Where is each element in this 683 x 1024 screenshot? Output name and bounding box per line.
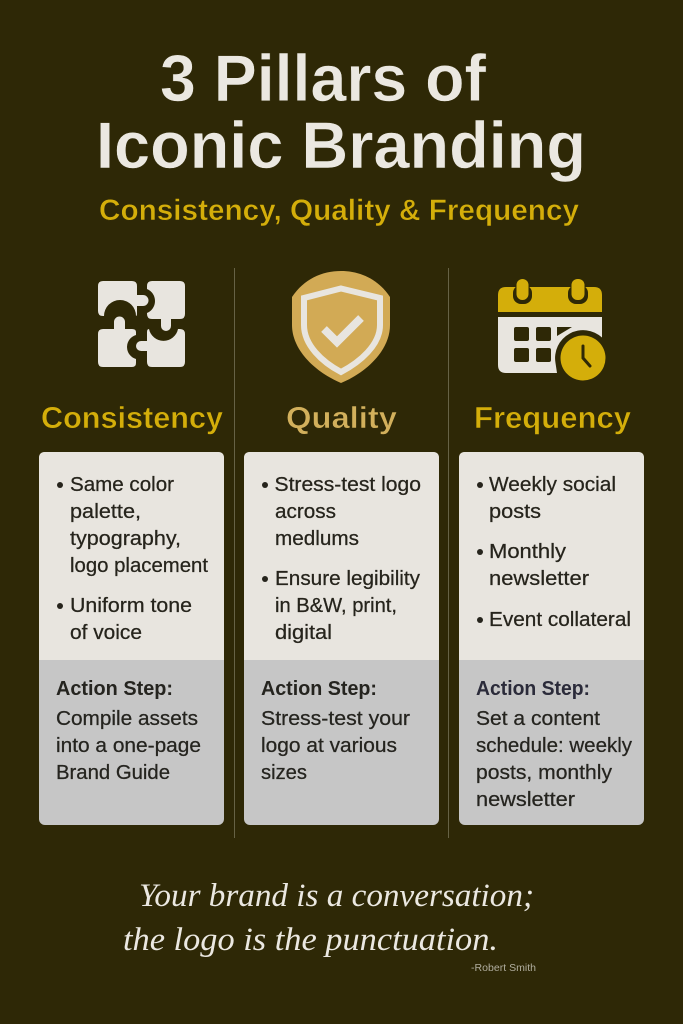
action step: frequency: schedule: weekly: [476, 735, 632, 757]
action step: frequency: Action Step:: [476, 678, 590, 700]
icon: puzzle: [98, 281, 185, 367]
action step: consistency: Compile assets: [56, 708, 198, 730]
bullet list: frequency: [477, 474, 631, 631]
bullet list: quality: across: [275, 501, 336, 523]
quote: Your brand is a conversation;: [139, 878, 534, 914]
action step: frequency: posts, monthly: [476, 762, 612, 784]
bullet list: consistency: palette,: [70, 501, 141, 523]
bullet list: quality: Ensure legibility: [275, 568, 420, 590]
panel: consistency: [39, 452, 224, 825]
action step: frequency: newsletter: [476, 789, 575, 811]
bullet list: frequency: Weekly social: [489, 474, 616, 496]
quote: the logo is the punctuation.: [123, 922, 498, 958]
action step: frequency: [476, 678, 632, 811]
bullet list: quality: digital: [275, 622, 332, 644]
quote: [123, 878, 534, 958]
panel: frequency: [459, 452, 644, 825]
bullet list: quality: [262, 474, 421, 644]
action step: consistency: [56, 678, 201, 784]
bullet list: consistency: Uniform tone: [70, 595, 192, 617]
title: 3 Pillars of: [160, 41, 487, 115]
bullet list: frequency: posts: [489, 501, 541, 523]
bullet list: consistency: of voice: [70, 622, 142, 644]
panel: quality: [244, 452, 439, 825]
heading: Consistency: Consistency: [41, 400, 224, 435]
bullet list: quality: Stress-test logo: [274, 474, 421, 496]
bullet list: frequency: Event collateral: [489, 609, 631, 631]
action step: consistency: Action Step:: [56, 678, 173, 700]
icon: calendar with clock: [498, 279, 606, 380]
attribution: -Robert Smith: [471, 963, 536, 974]
bullet list: consistency: logo placement: [70, 555, 208, 577]
title: [96, 41, 586, 182]
action step: frequency: Set a content: [476, 708, 600, 730]
subtitle: Consistency, Quality & Frequency: [99, 194, 579, 227]
action step: quality: Stress-test your: [261, 708, 410, 730]
bullet list: consistency: [57, 474, 208, 644]
bullet list: frequency: Monthly: [489, 541, 566, 563]
heading: Quality: Quality: [286, 400, 398, 435]
bullet list: quality: medlums: [275, 528, 359, 550]
bullet list: frequency: newsletter: [489, 568, 589, 590]
icon: shield: [292, 271, 390, 383]
action step: consistency: Brand Guide: [56, 762, 170, 784]
bullet list: quality: in B&W, print,: [275, 595, 397, 617]
heading: Frequency: Frequency: [474, 400, 632, 435]
action step: quality: [261, 678, 410, 784]
bullet list: consistency: Same color: [70, 474, 174, 496]
action step: quality: logo at various: [261, 735, 397, 757]
bullet list: consistency: typography,: [70, 528, 181, 550]
title: Iconic Branding: [96, 108, 586, 182]
action step: consistency: into a one-page: [56, 735, 201, 757]
action step: quality: sizes: [261, 762, 307, 784]
action step: quality: Action Step:: [261, 678, 377, 700]
